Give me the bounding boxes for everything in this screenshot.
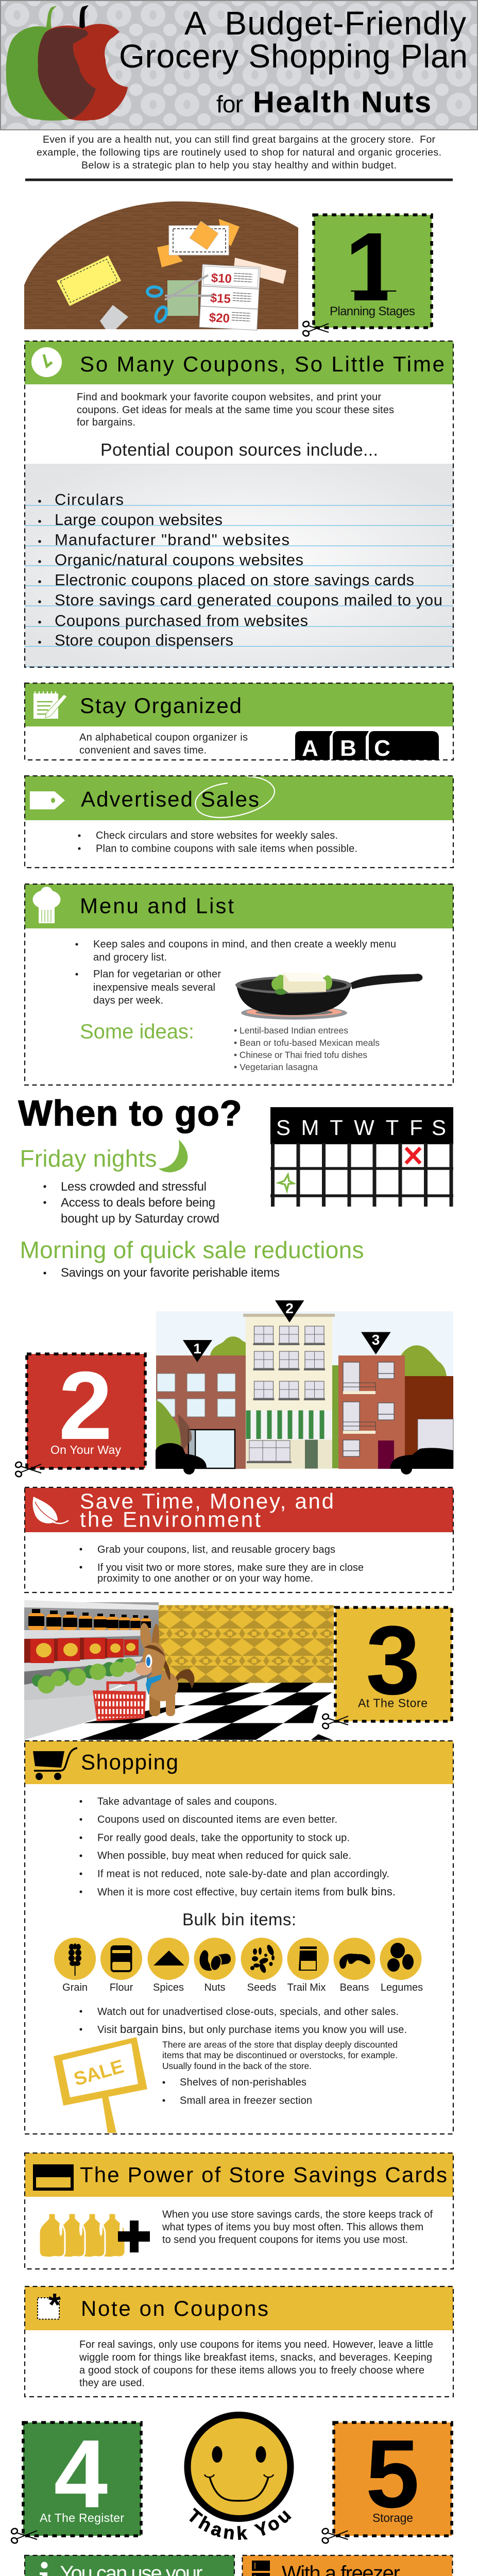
body text: to send you frequent coupons for items you use most. <box>162 2234 408 2246</box>
illustration: coupons on table: $10 <box>211 271 232 286</box>
panel: you can use your <box>24 2555 234 2576</box>
ideas list: • Lentil-based Indian entrees <box>234 1025 348 1036</box>
bullet list: and grocery list. <box>93 952 167 963</box>
panel header <box>242 2555 452 2576</box>
notebook list: Large coupon websites <box>55 511 223 529</box>
panel header: Stay Organized <box>80 693 242 718</box>
body text: they are used. <box>79 2378 145 2389</box>
building 1 <box>156 1355 246 1469</box>
panel header: Menu and List <box>80 893 234 918</box>
body text: Find and bookmark your favorite coupon websites, and print your <box>77 392 381 403</box>
icon: sale sign: SALE <box>71 2056 126 2090</box>
calendar <box>270 1107 453 1207</box>
card: step 3 at the store <box>321 1606 452 1730</box>
body text: wiggle room for things like breakfast items, snacks, and beverages. Keeping <box>79 2352 432 2363</box>
friday bullets: bought up by Saturday crowd <box>61 1212 219 1226</box>
icon: flour <box>110 1945 132 1972</box>
panel: note on coupons <box>25 2286 453 2397</box>
bullet list: Grab your coupons, list, and reusable grocery bags <box>97 1544 335 1555</box>
intro text: Below is a strategic plan to help you stay healthy and within budget. <box>81 160 397 171</box>
tree <box>156 1400 181 1455</box>
subheading: bulk bin items: Bulk bin items: <box>182 1910 296 1929</box>
card: step 1 planning stages <box>302 213 432 337</box>
notebook list: Store savings card generated coupons mailed to you <box>55 591 442 609</box>
icon: smiley thank you: Thank You <box>189 2507 292 2540</box>
panel header: The Power of Store Savings Cards <box>80 2163 447 2187</box>
bullet list: Keep sales and coupons in mind, and then create a weekly menu <box>93 939 396 950</box>
subheading: morning of quick sale reductions: Morning of quick sale reductions <box>20 1236 364 1263</box>
icon: trail mix <box>299 1946 317 1971</box>
panel: power of store savings cards <box>25 2153 453 2269</box>
shopping basket <box>93 1683 146 1721</box>
more bullets: Visit bargain bins, but only purchase items you know you will use. <box>97 2023 407 2036</box>
morning bullet: Savings on your favorite perishable items <box>61 1266 280 1280</box>
calendar: S <box>432 1115 446 1140</box>
bullet list: For really good deals, take the opportunity to stock up. <box>97 1832 350 1843</box>
panel header <box>25 341 453 384</box>
notebook list: Circulars <box>55 490 124 509</box>
calendar: T <box>330 1115 343 1140</box>
body text: For real savings, only use coupons for items you need. However, leave a little <box>79 2339 433 2350</box>
bullet list <box>79 1544 364 1584</box>
panel header <box>25 683 453 726</box>
bullet list: days per week. <box>93 995 163 1006</box>
bullet list: Take advantage of sales and coupons. <box>97 1796 277 1807</box>
icon: spices <box>153 1951 184 1965</box>
notebook list: Coupons purchased from websites <box>55 612 308 630</box>
card: step 5 storage: Storage <box>372 2511 413 2524</box>
bulk bin icons <box>54 1938 423 1993</box>
illustration: coupons on table <box>24 201 298 330</box>
body text: When you use store savings cards, the store keeps track of <box>162 2209 433 2221</box>
icon: beans <box>339 1954 370 1969</box>
card: step 2 on your way: On Your Way <box>50 1443 122 1456</box>
bulk bin labels: Legumes <box>381 1982 423 1993</box>
bargain bins text: Small area in freezer section <box>180 2095 312 2106</box>
panel header <box>25 2286 453 2330</box>
bullet list: When possible, buy meat when reduced for quick sale. <box>97 1850 351 1861</box>
notebook list: Organic/natural coupons websites <box>55 551 303 569</box>
more bullets: Watch out for unadvertised close-outs, specials, and other sales. <box>97 2006 399 2018</box>
notebook list: Manufacturer "brand" websites <box>55 531 289 549</box>
panel header: * <box>48 2287 61 2323</box>
illustration: coupons on table: $15 <box>210 291 231 306</box>
title: A Budget-Friendly <box>184 5 466 42</box>
calendar: F <box>409 1115 423 1140</box>
icon: half pepper half apple <box>6 5 128 121</box>
icon: smiley thank you <box>184 2412 294 2540</box>
header banner <box>1 1 477 130</box>
calendar: T <box>386 1115 399 1140</box>
panel: advertised sales <box>25 776 453 868</box>
bargain bins text: There are areas of the store that display deeply discounted <box>162 2039 398 2049</box>
panel header <box>25 2555 234 2576</box>
icon: alphabetical tabs: A <box>302 736 318 761</box>
icon: crescent moon <box>159 1140 187 1172</box>
body text: for bargains. <box>77 417 135 428</box>
donkey <box>135 1622 195 1716</box>
notebook list: Electronic coupons placed on store savings cards <box>55 571 414 589</box>
panel header <box>25 776 453 820</box>
bullet list: Plan to combine coupons with sale items when possible. <box>96 843 357 854</box>
notebook list <box>25 464 453 667</box>
friday bullets: Less crowded and stressful <box>61 1180 207 1194</box>
calendar: W <box>354 1115 374 1140</box>
more bullets <box>79 2006 407 2036</box>
building 4 <box>405 1376 453 1469</box>
ideas list: • Vegetarian lasagna <box>234 1062 318 1072</box>
panel header <box>25 1488 453 1532</box>
card: step 1 planning stages: 1 <box>345 213 399 321</box>
bullet list: Check circulars and store websites for weekly sales. <box>96 830 338 841</box>
icon: legumes <box>387 1943 414 1972</box>
bargain bins text: items that may be discontinued or overstocks, for example. <box>162 2050 398 2060</box>
title: Health Nuts <box>253 86 431 119</box>
icon: tofu in a pan <box>235 973 422 1020</box>
notebook list: Store coupon dispensers <box>55 631 233 649</box>
body text <box>79 732 248 756</box>
location pins <box>183 1300 391 1362</box>
bargain bins text: Shelves of non-perishables <box>180 2077 306 2088</box>
panel: stay organized <box>25 683 453 761</box>
location pins: 3 <box>372 1332 380 1348</box>
produce <box>32 1658 136 1693</box>
illustration: donkey shopping in store aisle <box>24 1600 334 1740</box>
card: step 4 at the register: At The Register <box>40 2511 124 2524</box>
title: for <box>216 91 243 117</box>
ideas list: • Chinese or Thai fried tofu dishes <box>234 1050 367 1060</box>
body text: what types of items you buy most often. This allows them <box>162 2222 423 2233</box>
title <box>119 5 468 119</box>
icon: alphabetical tabs: C <box>374 736 390 761</box>
icon: sale sign <box>54 2037 147 2133</box>
bulk bin labels: Spices <box>153 1982 184 1993</box>
body text <box>162 2209 433 2246</box>
card: step 3 at the store: At The Store <box>358 1697 428 1710</box>
bullet list: Plan for vegetarian or other <box>93 969 221 980</box>
bullet list <box>78 830 357 854</box>
building 2 <box>243 1314 335 1469</box>
illustration: coupons on table: $20 <box>209 311 230 326</box>
panel: save time money environment <box>25 1487 453 1592</box>
body text: coupons. Get ideas for meals at the same time you scour these sites <box>77 404 394 416</box>
bullet list <box>75 939 396 1006</box>
panel header: Note on Coupons <box>81 2296 268 2320</box>
bulk bin labels: Nuts <box>204 1982 226 1993</box>
bullet list: proximity to one another or on your way home. <box>97 1573 313 1584</box>
intro text: Even if you are a health nut, you can still find great bargains at the grocery store. For <box>43 134 436 145</box>
card: step 5 storage: 5 <box>366 2419 419 2528</box>
panel header: Shopping <box>81 1750 178 1774</box>
bulk bin labels <box>62 1982 423 1993</box>
bulk bin labels: Seeds <box>247 1982 276 1993</box>
body text <box>79 2339 433 2389</box>
panel: so many coupons <box>25 341 453 667</box>
bulk bin labels: Grain <box>62 1982 88 1993</box>
intro text: example, the following tips are routinely used to shop for natural and organic groceries. <box>37 147 441 158</box>
bulk bin labels: Beans <box>340 1982 369 1993</box>
subheading: friday nights: Friday nights <box>20 1145 157 1172</box>
cereal boxes <box>24 1638 139 1663</box>
panel header <box>25 2153 453 2197</box>
bulk bin labels: Trail Mix <box>287 1982 326 1993</box>
icon: seeds <box>250 1944 275 1974</box>
building 3 <box>338 1355 405 1469</box>
cars <box>156 1443 453 1475</box>
icon: grain <box>69 1943 81 1976</box>
icon: alphabetical tabs: B <box>340 736 356 761</box>
title: Grocery Shopping Plan <box>119 38 468 75</box>
illustration: street with three stores <box>156 1300 453 1475</box>
card: step 1 planning stages: Planning Stages <box>330 304 415 318</box>
card: step 3 at the store: 3 <box>366 1606 420 1715</box>
panel header: Save Time, Money, and <box>80 1489 334 1513</box>
bulk bin labels: Flour <box>110 1982 133 1993</box>
calendar: M <box>301 1115 319 1140</box>
bargain bins text <box>162 2039 398 2106</box>
card: step 4 at the register <box>10 2419 141 2544</box>
ideas list: • Bean or tofu-based Mexican meals <box>234 1038 380 1048</box>
panel header: Advertised Sales <box>81 787 259 811</box>
jars <box>28 1609 151 1630</box>
body text <box>77 392 394 428</box>
ideas list <box>234 1025 380 1072</box>
panel: with a freezer <box>242 2555 452 2576</box>
friday bullets: Access to deals before being <box>61 1196 215 1210</box>
bargain bins text: Usually found in the back of the store. <box>162 2061 312 2071</box>
calendar: S <box>276 1115 291 1140</box>
checkered floor <box>79 1683 332 1740</box>
card: step 2 on your way: 2 <box>59 1351 112 1460</box>
icon: alphabetical tabs <box>295 731 439 761</box>
icon: jugs plus <box>39 2213 150 2258</box>
panel header: the Environment <box>80 1507 261 1531</box>
store shelves <box>24 1600 159 1740</box>
bullet list: inexpensive meals several <box>93 982 215 993</box>
location pins: 1 <box>193 1341 201 1357</box>
bullet list: When it is more cost effective, buy certain items from bulk bins. <box>97 1885 396 1898</box>
location pins: 2 <box>285 1300 294 1316</box>
panel: menu and list <box>25 884 453 1085</box>
intro text <box>37 134 441 171</box>
card: step 5 storage <box>321 2419 452 2544</box>
body text: a good stock of coupons for these items allows you to freely choose where <box>79 2365 424 2376</box>
bullet list: If meat is not reduced, note sale-by-date and plan accordingly. <box>97 1869 389 1880</box>
subheading: Potential coupon sources include... <box>100 440 378 460</box>
panel header <box>25 1741 453 1784</box>
bullet list: Coupons used on discounted items are even better. <box>97 1814 337 1825</box>
card: step 4 at the register: 4 <box>54 2419 108 2528</box>
friday bullets <box>43 1180 219 1226</box>
bullet list <box>79 1796 396 1898</box>
subheading: some ideas: Some ideas: <box>80 1020 194 1043</box>
heading: when to go: When to go? <box>19 1093 242 1133</box>
panel header: So Many Coupons, So Little Time <box>80 352 445 376</box>
body text: convenient and saves time. <box>79 745 207 756</box>
panel header <box>25 884 453 928</box>
icon: nuts <box>200 1950 231 1972</box>
panel: shopping <box>25 1741 453 2134</box>
bullet list: If you visit two or more stores, make sure they are in close <box>97 1562 364 1573</box>
body text: An alphabetical coupon organizer is <box>79 732 248 743</box>
card: step 2 on your way <box>14 1351 145 1478</box>
